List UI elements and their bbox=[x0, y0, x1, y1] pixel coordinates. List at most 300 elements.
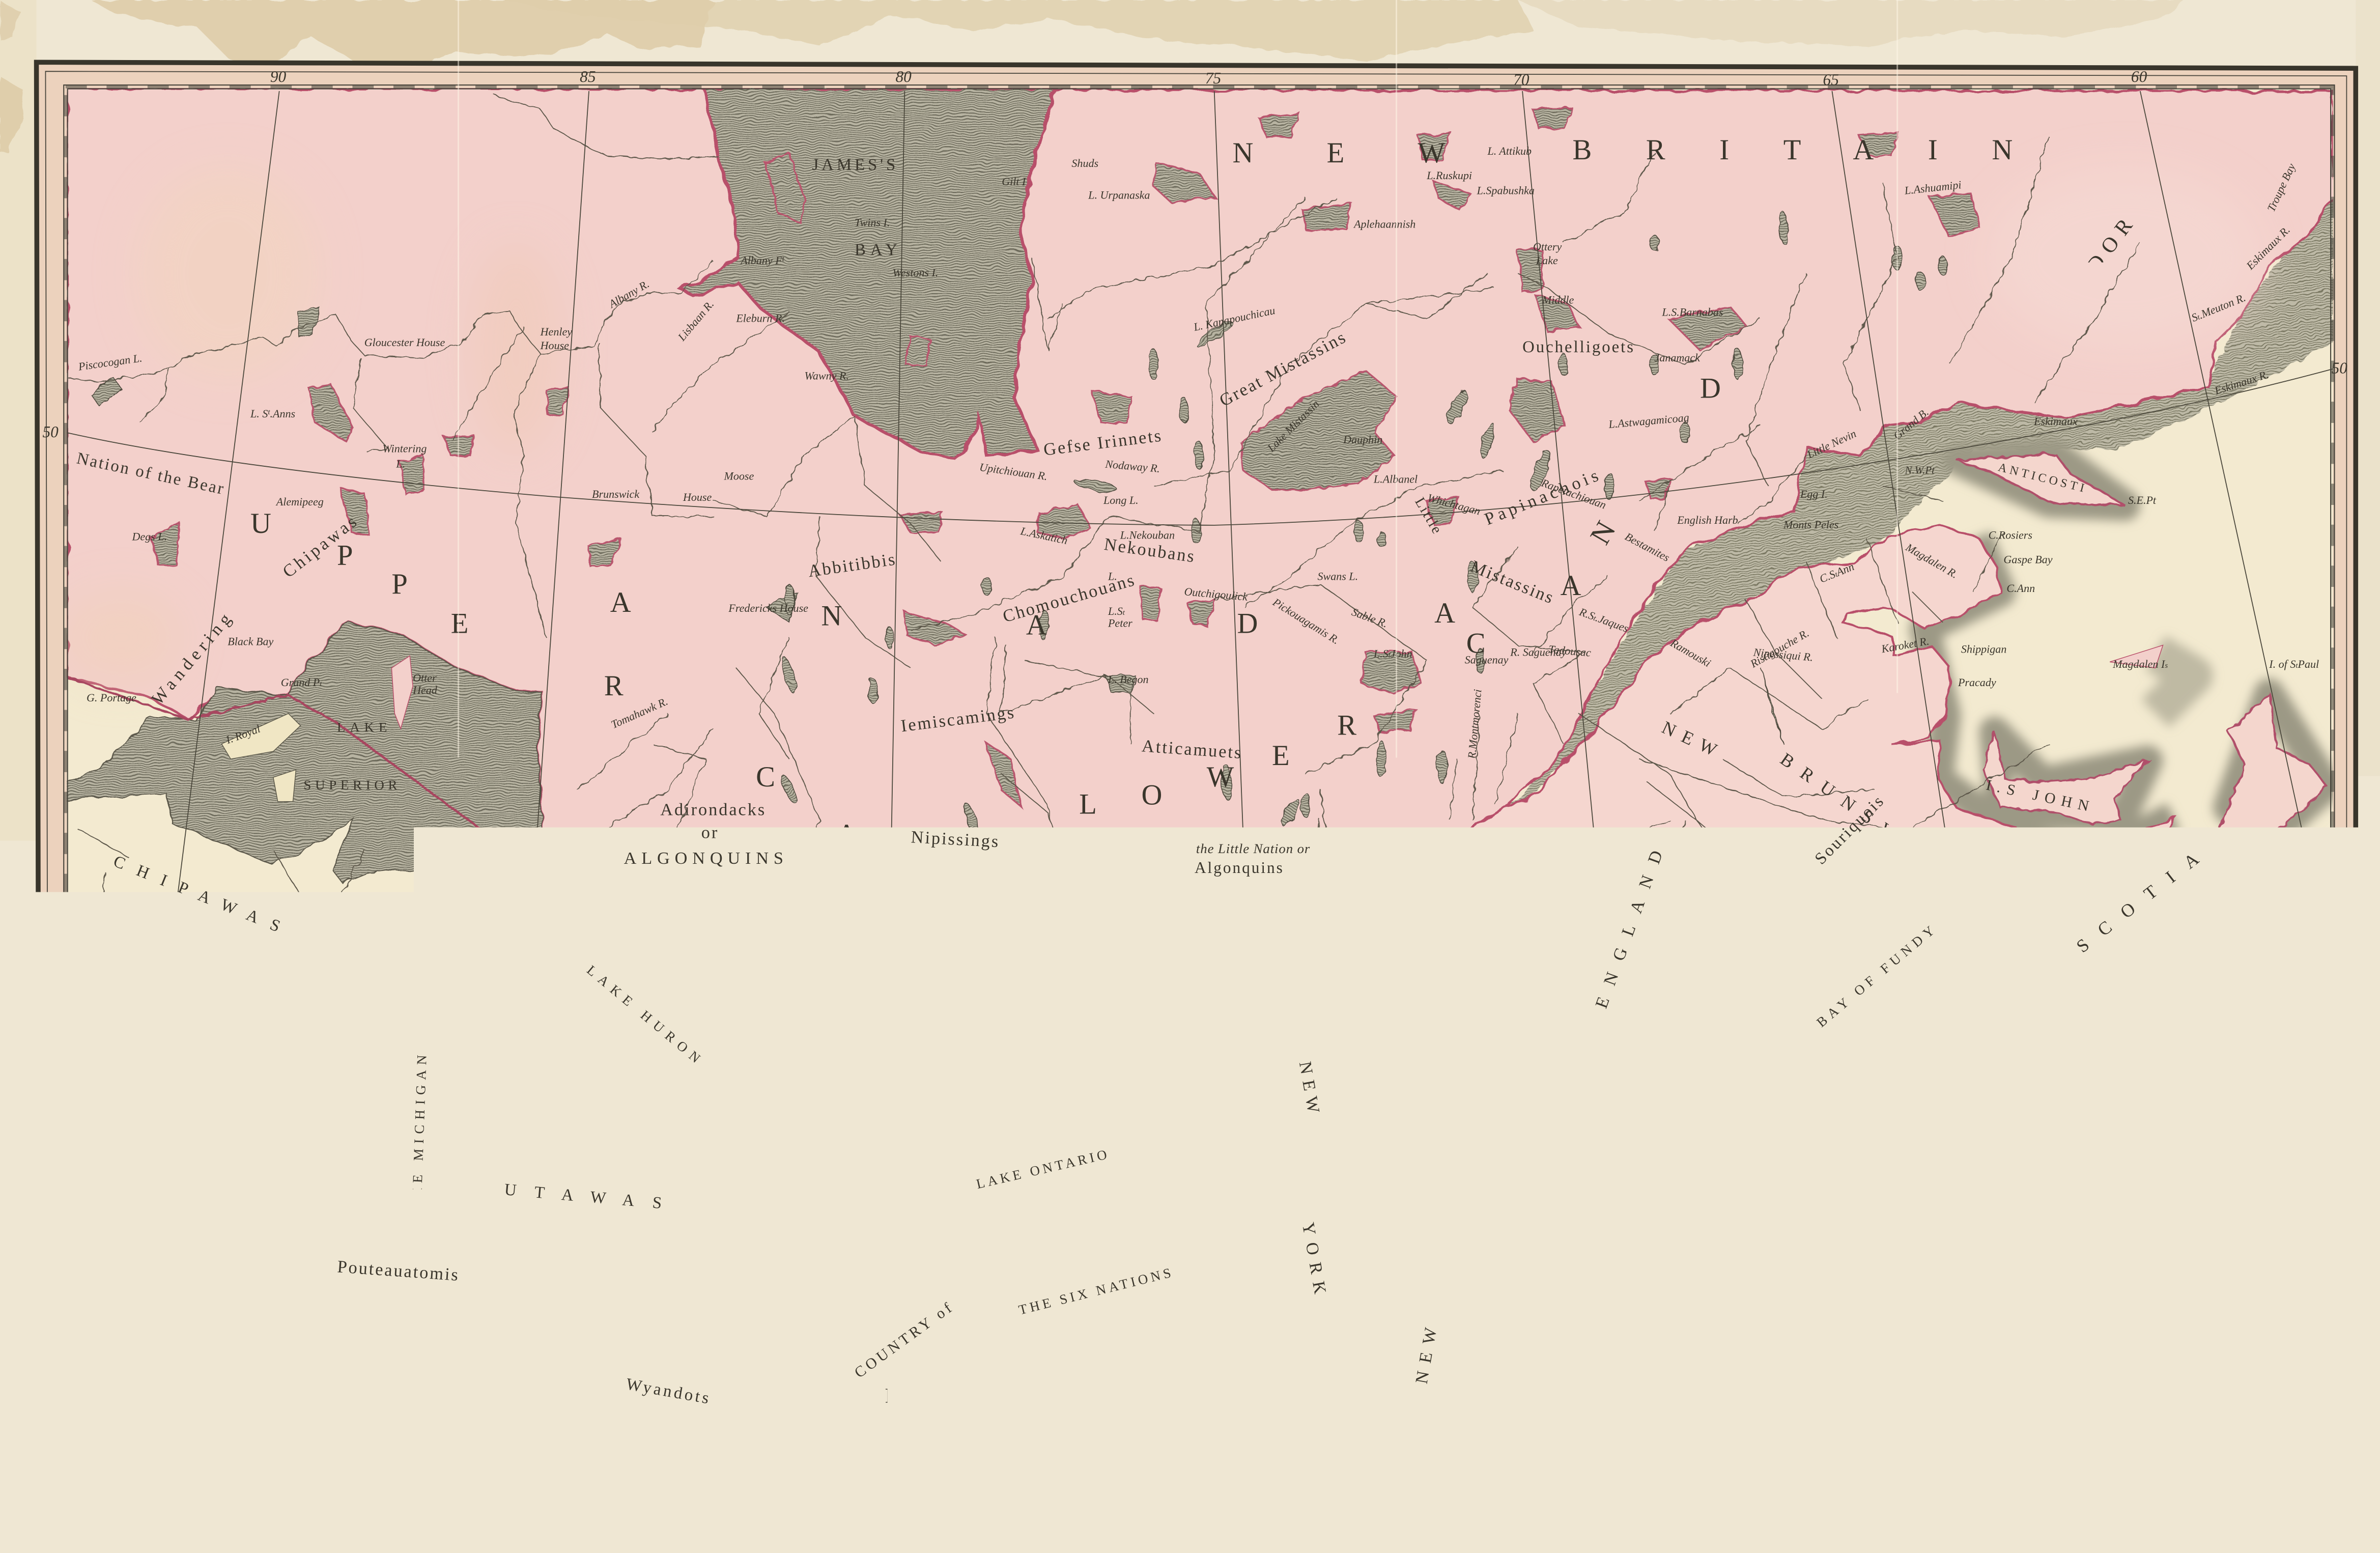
labels: small place names: Peterham bbox=[1469, 1235, 1513, 1248]
labels: small place names: Rufus R. bbox=[103, 993, 143, 1016]
labels: small place names: R.StNicholas bbox=[482, 1098, 540, 1111]
labels: small place names: La Heve bbox=[2051, 1023, 2091, 1047]
labels: small place names: L. Begon bbox=[1108, 673, 1149, 686]
labels: lower-left territories: Chipawas bbox=[542, 1016, 622, 1071]
label: River St Lawrence: RIVER S bbox=[1641, 572, 1730, 647]
labels: small place names: Sandwich bbox=[1586, 1318, 1630, 1331]
labels: small place names: Monts Peles bbox=[1783, 518, 1838, 531]
labels: small place names: St.Thomas bbox=[1555, 792, 1603, 820]
labels: small place names: Iroquois Bay bbox=[788, 1045, 848, 1069]
labels: New Brunswick and Nova Scotia: ANTICOSTI bbox=[1997, 461, 2089, 496]
labels: small place names: White Fish Pt bbox=[447, 853, 509, 881]
sea: River St Lawrence estuary bbox=[1371, 190, 2333, 949]
labels: small place names: Wawny R. bbox=[805, 370, 849, 382]
labels: small place names: StJoseph bbox=[624, 895, 663, 925]
boundary line across the lakes bbox=[67, 677, 929, 1321]
labels: small place names: Degs L. bbox=[131, 530, 167, 543]
labels: New Brunswick and Nova Scotia: NEW bbox=[1659, 717, 1727, 764]
labels: small place names: Albany Ft bbox=[1297, 1250, 1342, 1262]
parallels bbox=[67, 369, 2342, 1456]
big territory letters: BRITAIN bbox=[1573, 134, 2013, 166]
labels: small place names: George bbox=[1662, 1074, 1695, 1086]
labels: small place names: C.Cod bbox=[1659, 1285, 1688, 1297]
labels: small place names: Bay bbox=[2125, 807, 2142, 820]
labels: small place names: t bbox=[268, 408, 270, 416]
labels: lower-left territories: Molhominis bbox=[266, 984, 349, 1072]
labels: tribal names, upper map: Algonquins bbox=[1195, 859, 1284, 877]
big territory letters: W bbox=[1207, 761, 1234, 793]
labels: small place names: Temiscaming bbox=[911, 758, 962, 769]
big territory letters: A bbox=[1561, 570, 1581, 602]
labels: small place names: L.Askatich bbox=[1019, 524, 1069, 547]
labels: small place names: t bbox=[782, 255, 785, 263]
labels: small place names: St.Ann bbox=[1791, 779, 1820, 792]
labels: small place names: Eskimaux R. bbox=[2213, 368, 2270, 397]
labels: small place names: R.Masquenonge bbox=[1288, 846, 1324, 919]
labels: small place names: Long L. bbox=[1103, 494, 1139, 506]
label: James's Bay bbox=[812, 156, 902, 259]
labels: New Brunswick and Nova Scotia: BRUNSWICK bbox=[1776, 749, 1967, 891]
labels: small place names: Cape bbox=[1973, 785, 1997, 798]
Lake Ontario bbox=[929, 1104, 1207, 1222]
labels: small place names: R. Bachouanan bbox=[598, 828, 664, 876]
labels: small place names: Port Rossignol bbox=[2002, 1045, 2071, 1075]
big territory letters: D bbox=[1058, 992, 1079, 1024]
labels: small place names: Sandusky bbox=[649, 1367, 693, 1381]
labels: small place names: Eskimaux bbox=[2033, 415, 2078, 428]
labels: small place names: Vermillion R. bbox=[88, 972, 148, 1004]
labels: small place names: Whichtagan bbox=[1426, 491, 1482, 518]
labels: small place names: Ashiks bbox=[492, 1031, 523, 1044]
labels: small place names: Portsmouth bbox=[1517, 1195, 1570, 1208]
cartouche: subtitle: from its embouchure to its source bbox=[1888, 1321, 2216, 1345]
labels: small place names: Pt.au Pele bbox=[686, 1292, 732, 1305]
big territory letters: N bbox=[821, 601, 842, 632]
labels: New Brunswick and Nova Scotia bbox=[1659, 461, 2216, 1032]
labels: New Brunswick and Nova Scotia: Souriquois bbox=[1811, 791, 1888, 868]
labels: small place names: Saguenay bbox=[1465, 653, 1509, 666]
labels: small place names: South R. bbox=[982, 891, 1019, 925]
labels: small place names: Long Fall bbox=[1041, 825, 1086, 837]
big territory letters bbox=[250, 134, 2013, 1087]
labels: small place names: Piscocogan L. bbox=[77, 351, 143, 373]
labels: small place names bbox=[77, 145, 2319, 1445]
labels: small place names: Oepack bbox=[1806, 825, 1841, 837]
labels: small place names: Bartoul bbox=[1597, 1155, 1631, 1168]
labels: lower-left territories: UTAWAS bbox=[503, 1180, 681, 1214]
labels: small place names: Lake Mistassin bbox=[1264, 398, 1322, 455]
labels: New York and New England: NEW bbox=[1295, 1060, 1324, 1120]
degree numbers: 60 bbox=[2131, 68, 2147, 86]
labels: small place names: Magdalen Is bbox=[2112, 658, 2168, 670]
degree numbers: 45 bbox=[2335, 891, 2350, 909]
big territory letters: R bbox=[604, 670, 624, 702]
label: River St Lawrence: T bbox=[1718, 567, 1734, 584]
labels: small place names: Nicolete bbox=[1418, 886, 1458, 911]
labels: small place names: Boston Bay bbox=[1639, 1262, 1691, 1275]
labels: small place names: Bank bbox=[1703, 1312, 1726, 1325]
soft stains on the pink wash bbox=[61, 167, 2261, 683]
labels: small place names: Head bbox=[412, 684, 438, 696]
region: New Britain, Upper and Lower Canada (pink) bbox=[67, 88, 2333, 1269]
island: Cape Breton bbox=[2218, 694, 2327, 841]
big territory letters: O bbox=[1142, 780, 1162, 811]
labels: small place names: Annapolis Royal bbox=[1911, 965, 1986, 1005]
labels: small place names: C.Rosiers bbox=[1989, 529, 2032, 542]
labels: tribal names, upper map: Atticamuets bbox=[1141, 736, 1243, 763]
labels: small place names: Rhode I. bbox=[1558, 1379, 1577, 1419]
labels: small place names: St.John bbox=[1351, 980, 1383, 993]
labels: tribal names, upper map bbox=[75, 327, 1635, 877]
labels: small place names: Gloucester House bbox=[364, 336, 445, 349]
labels: small place names: Gilt I bbox=[1002, 175, 1027, 188]
label: Gulf of St Lawrence: T bbox=[2050, 611, 2067, 629]
labels: small place names: Pascol bbox=[1605, 1125, 1636, 1138]
big territory letters: A bbox=[1434, 598, 1455, 629]
labels: small place names: Bay bbox=[1214, 1132, 1232, 1144]
labels: small place names: Norwich bbox=[1426, 1092, 1465, 1105]
cartouche flourishes bbox=[1940, 1181, 2163, 1291]
labels: tribal names, upper map: Mistassins bbox=[1468, 557, 1557, 608]
labels: small place names: Wisconsin R. bbox=[111, 1144, 171, 1171]
labels: small place names: R.Montmorenci bbox=[1465, 689, 1484, 760]
labels: small place names: R.Miami bbox=[524, 1328, 565, 1353]
labels: small place names: Outchigoulick bbox=[1184, 585, 1249, 603]
labels: small place names: Grand B. bbox=[1891, 406, 1931, 442]
labels: small place names: Westons I. bbox=[893, 266, 938, 279]
labels: small place names: St.Croix bbox=[1731, 943, 1766, 956]
region: New Brunswick and Nova Scotia (pink) bbox=[1371, 525, 2255, 1108]
labels: small place names: Sandlands Hr bbox=[2163, 911, 2224, 924]
island: Long Island bbox=[1348, 1375, 1503, 1460]
cartouche oval bbox=[1878, 1219, 2227, 1431]
labels: small place names: N.Cape bbox=[2276, 696, 2311, 709]
degree numbers: 65 bbox=[1823, 71, 1839, 89]
engraver credit: Neele sc. Strand. bbox=[2282, 1492, 2344, 1502]
labels: small place names: Middle bbox=[1542, 293, 1574, 306]
labels: small place names: L.Spabushka bbox=[1477, 184, 1535, 197]
labels: small place names: Pickouagamis R. bbox=[1270, 596, 1342, 646]
labels: small place names: Grand R. bbox=[486, 1144, 527, 1156]
degree numbers: 90 bbox=[97, 1464, 114, 1482]
big territory letters: U bbox=[250, 508, 271, 540]
labels: small place names: Lawrence bbox=[2197, 703, 2242, 716]
labels: small place names: Windsor bbox=[1419, 1119, 1457, 1132]
labels: small place names: of Niagara bbox=[1017, 1189, 1066, 1202]
Lake Huron bbox=[531, 908, 879, 1233]
big territory letters: N bbox=[1584, 516, 1622, 550]
labels: small place names: I. of StPaul bbox=[2269, 658, 2319, 670]
labels: small place names: L. S bbox=[250, 407, 268, 420]
labels: small place names: R.Chaudiere bbox=[1501, 826, 1557, 865]
labels: small place names: I. Royal bbox=[224, 722, 262, 746]
labels: small place names: St.Francis bbox=[1392, 920, 1439, 951]
labels: small place names: R.Clyde or St.Johns bbox=[1647, 773, 1719, 844]
labels: New Brunswick and Nova Scotia: BAY OF FUNDY bbox=[1814, 920, 1941, 1030]
labels: small place names: C.Sambro bbox=[2079, 1004, 2126, 1028]
cartouche: of the: — of the — bbox=[2011, 1278, 2093, 1296]
labels: small place names: Lunenburg bbox=[2003, 1004, 2052, 1016]
cartouche word: Map: Map bbox=[2014, 1234, 2089, 1278]
labels: small place names: Fall of Niagara bbox=[928, 1206, 991, 1217]
labels: small place names: Otter bbox=[413, 671, 437, 684]
labels: lower-left territories: CHIPAWAS bbox=[111, 852, 295, 941]
labels: small place names: Gentilly bbox=[1427, 863, 1463, 876]
labels: small place names: Green Bay bbox=[325, 1054, 360, 1102]
labels: New Brunswick and Nova Scotia: SCOTIA bbox=[2073, 838, 2216, 956]
big territory letters: D bbox=[1237, 608, 1258, 640]
labels: small place names: Karoket R. bbox=[1880, 634, 1930, 656]
big territory letters: N bbox=[912, 877, 933, 909]
labels: small place names: Bestamites bbox=[1623, 530, 1672, 564]
labels: New York and New England: NEW bbox=[1412, 1318, 1442, 1385]
labels: small place names: Amherst I bbox=[2106, 697, 2151, 710]
labels: small place names: Henley bbox=[540, 325, 572, 338]
labels: small place names: Pracady bbox=[1958, 676, 1996, 689]
labels: small place names: Leodharabury bbox=[1009, 1323, 1073, 1336]
James's Bay bbox=[680, 88, 1055, 460]
labels: small place names: Penobscot bbox=[1730, 1037, 1777, 1050]
labels: lower-left territories: Pouteauatomis bbox=[336, 1257, 460, 1285]
labels: small place names: Ft.Erie bbox=[953, 1238, 984, 1251]
labels: small place names: Sandwich bbox=[665, 1247, 709, 1259]
label: Gulf of St Lawrence: OF bbox=[2129, 557, 2155, 576]
labels: small place names: Dauphin bbox=[1343, 433, 1382, 446]
labels: small place names: S.E.Pt bbox=[2128, 494, 2157, 506]
cartouche: map title: to illustrate a picturesque bbox=[1913, 1345, 2186, 1370]
labels: small place names: Kingston bbox=[1130, 1093, 1171, 1106]
labels: New York and New England: ENGLAND bbox=[1592, 835, 1671, 1011]
labels: small place names: StGeorges bbox=[1697, 1298, 1742, 1311]
labels: small place names: Tomahawk R. bbox=[609, 695, 670, 731]
labels: small place names: Troupe Bay bbox=[2264, 161, 2298, 214]
labels: lakes: LAKE ONTARIO bbox=[975, 1146, 1111, 1192]
labels: small place names: Aplehaannish bbox=[1353, 217, 1415, 230]
labels: small place names: Montreal bbox=[1302, 949, 1344, 962]
labels: small place names: Rapetachiouan bbox=[1539, 476, 1608, 512]
labels: tribal names, upper map: Chomouchouans bbox=[1001, 570, 1138, 626]
region: New Jersey (pink) bbox=[1233, 1374, 1348, 1460]
labels: tribal names, upper map: Chipawas bbox=[279, 511, 362, 582]
degree numbers: 75 bbox=[1258, 1464, 1274, 1482]
labels: small place names: Marameg R. bbox=[455, 1189, 513, 1213]
label: Gulf of St Lawrence: S bbox=[2033, 614, 2055, 641]
labels: small place names: Detroit bbox=[622, 1248, 655, 1261]
labels: small place names: Manchester bbox=[1358, 1197, 1412, 1209]
big territory letters: E bbox=[1272, 740, 1290, 772]
cartouche: Canadas: CANADAS . bbox=[1999, 1399, 2114, 1417]
labels: tribal names, upper map: Nekoubans bbox=[1103, 534, 1197, 567]
labels: small place names: Bennington bbox=[1363, 1213, 1415, 1226]
labels: small place names: Shuds bbox=[1071, 157, 1098, 170]
labels: tribal names, upper map: Little bbox=[1411, 495, 1446, 538]
labels: small place names: Magdalen R. bbox=[1903, 541, 1960, 581]
region: New England (green) bbox=[1358, 833, 1809, 1420]
imprint line: 1807 by R. Phillips New Bridge Street. bbox=[1163, 1510, 1425, 1528]
labels: small place names: Ouranghena bbox=[1562, 750, 1618, 789]
labels: tribal names, upper map: Great Mistassins bbox=[1216, 327, 1350, 410]
labels: small place names: Katskill bbox=[1278, 1295, 1313, 1308]
labels: small place names: Esuaghicks R. bbox=[828, 891, 875, 951]
cartouche: River St Lawrence: RIVER S bbox=[1894, 1292, 2015, 1322]
labels: tribal names, upper map: Nipissings bbox=[911, 827, 1000, 851]
labels: small place names: Bay bbox=[1731, 1050, 1748, 1062]
labels: small place names: Upitchiouan R. bbox=[979, 461, 1049, 483]
big territory letters: C bbox=[756, 761, 775, 793]
labels: small place names: Johnstown bbox=[1131, 1034, 1179, 1047]
labels: small place names: Hadley bbox=[1472, 1254, 1505, 1267]
cartouche: River St Lawrence: T bbox=[2018, 1295, 2027, 1312]
labels: small place names: L. bbox=[1108, 570, 1117, 582]
degree numbers: 45 bbox=[44, 936, 60, 954]
labels: small place names: Charlestown bbox=[1462, 1126, 1520, 1144]
labels: small place names: Egg I. bbox=[1800, 488, 1828, 500]
big territory letters: A bbox=[836, 819, 857, 851]
island: St John bbox=[1984, 732, 2148, 824]
labels: small place names: Black Bay bbox=[228, 635, 274, 648]
label: Labrador: LABRADOR bbox=[2016, 208, 2142, 364]
labels: small place names: Shippigan bbox=[1961, 642, 2006, 655]
labels: lakes: LAKE ERIE bbox=[748, 1272, 840, 1303]
big territory letters: P bbox=[337, 540, 353, 571]
labels: small place names: Amherstburg bbox=[664, 1262, 723, 1275]
labels: lakes: SUPERIOR bbox=[303, 777, 401, 793]
degree numbers: 75 bbox=[1205, 69, 1221, 87]
labels: small place names: Wabash R. bbox=[367, 1391, 414, 1426]
cartouche: map title bbox=[1878, 1181, 2227, 1436]
labels: small place names: Ramouski bbox=[1668, 636, 1713, 669]
big territory letters: L bbox=[1079, 789, 1097, 821]
labels: small place names: Three Rivers bbox=[1364, 824, 1395, 882]
labels: tribal names, upper map: the Little Nation or bbox=[1196, 841, 1310, 856]
big territory letters: A bbox=[972, 938, 993, 969]
label: Gulf of St Lawrence: GULF bbox=[2094, 502, 2175, 541]
labels: small place names: Moose bbox=[723, 469, 754, 482]
labels: small place names: G. Portage bbox=[87, 691, 136, 704]
labels: lower-left territories: Wyandots bbox=[625, 1375, 713, 1408]
labels: small place names: Belfast bbox=[1669, 1040, 1701, 1053]
labels: small place names: R.St.Jaques bbox=[1577, 605, 1630, 635]
imprint line: London Published March 1 bbox=[974, 1510, 1155, 1528]
labels: lower-left territories: Masooutens bbox=[79, 1207, 191, 1272]
labels: small place names: Sable R. bbox=[1350, 605, 1390, 630]
labels: tribal names, upper map: or bbox=[701, 823, 719, 842]
labels: small place names: .Anns bbox=[270, 407, 295, 420]
labels: small place names: Boston bbox=[1541, 1277, 1572, 1290]
labels: small place names: Old Caichi R. bbox=[1874, 689, 1935, 727]
labels: small place names: Berthier bbox=[1345, 916, 1382, 928]
labels: small place names: N.W.Pt bbox=[1905, 464, 1935, 476]
labels: small place names: Peter bbox=[1108, 617, 1132, 630]
labels: small place names: R. Saguenay bbox=[1510, 645, 1567, 658]
labels: tribal names, upper map: Wandering bbox=[148, 606, 238, 709]
coastal shading: gulf and Atlantic bbox=[1404, 454, 2327, 1434]
labels: small place names: Long I. bbox=[888, 1257, 920, 1270]
labels: small place names: Janamack bbox=[1655, 351, 1701, 364]
labels: small place names: Eel R. bbox=[273, 1416, 302, 1445]
yellow wash: lands south of the lakes bbox=[67, 941, 881, 1460]
labels: small place names: Nipisings R. bbox=[863, 768, 905, 821]
cartouche: River St Lawrence: .LAWRENCE bbox=[2030, 1292, 2208, 1322]
labels: small place names: Kinderhook bbox=[1343, 1265, 1397, 1278]
labels: New York and New England bbox=[1295, 835, 1671, 1385]
labels: small place names: C.Canso bbox=[2261, 858, 2301, 871]
labels: tribal names, upper map: Nation of the Bear bbox=[75, 449, 226, 498]
labels: small place names: Jedemweight R. bbox=[1856, 860, 1926, 898]
labels: small place names: Wintering bbox=[383, 442, 427, 455]
labels: small place names: L.Sinagoe bbox=[1293, 928, 1339, 941]
labels: small place names: Jemseig bbox=[1806, 809, 1843, 822]
labels: small place names: L.Ashuamipi bbox=[1904, 178, 1962, 197]
labels: small place names: L.Nipissing bbox=[846, 867, 898, 880]
labels: small place names: Nipessiqui R. bbox=[1752, 645, 1814, 664]
labels: small place names: White R. bbox=[483, 1121, 521, 1134]
labels: small place names: L.Nekouban bbox=[1120, 529, 1175, 542]
labels: small place names: Ouramana L. bbox=[1494, 941, 1555, 959]
labels: small place names: C.Ann bbox=[2006, 582, 2035, 595]
labels: small place names: Quebec bbox=[1432, 769, 1451, 805]
labels: New York and New England: YORK bbox=[1298, 1221, 1331, 1303]
paper fold lines bbox=[459, 0, 1897, 1553]
labels: small place names: Beaumont bbox=[1494, 796, 1541, 826]
labels: lakes: LONG I. bbox=[1378, 1423, 1438, 1456]
labels: small place names: Merrit bbox=[1798, 1007, 1828, 1020]
labels: small place names: L.Simon bbox=[827, 1095, 864, 1108]
labels: small place names: Fort Dauphin bbox=[2268, 702, 2314, 761]
labels: small place names: R.StJoseph bbox=[462, 1243, 512, 1272]
labels: lakes: LAKE MICHIGAN bbox=[408, 1050, 430, 1227]
labels: small place names: East Cape bbox=[2147, 746, 2194, 758]
labels: small place names: Cornwall bbox=[1373, 1019, 1416, 1035]
labels: lakes: LAKE HURON bbox=[584, 962, 708, 1070]
degree numbers: 65 bbox=[2032, 1464, 2048, 1482]
labels: small place names: C.StAnn bbox=[1818, 560, 1856, 585]
labels: small place names: Ottery bbox=[1533, 240, 1562, 253]
labels: small place names: Nodaway R. bbox=[1104, 458, 1160, 475]
labels: small place names: Falls bbox=[1533, 863, 1556, 876]
labels: small place names: Grand Pt bbox=[281, 676, 322, 689]
labels: small place names: R.Genesee bbox=[936, 1246, 984, 1281]
labels: small place names: Ristigouche R. bbox=[1748, 627, 1811, 670]
labels: lower-left territories bbox=[79, 852, 1175, 1408]
labels: small place names: Cardigan bbox=[2125, 792, 2168, 804]
degree numbers: 85 bbox=[580, 68, 596, 86]
labels: tribal names, upper map: Abbitibbis bbox=[807, 549, 897, 581]
big territory letters: D bbox=[1700, 373, 1721, 404]
labels: small place names: Grand bbox=[490, 1050, 520, 1062]
labels: small place names: Oguntecogs bbox=[1490, 949, 1544, 962]
labels: small place names: L.StClair bbox=[614, 1229, 656, 1241]
big territory letters: NEW bbox=[1233, 137, 1446, 169]
region: New York and Six Nations (pale yellow) bbox=[868, 1017, 1404, 1427]
labels: small place names: Machiche R. bbox=[1348, 838, 1380, 897]
labels: small place names: Salisbury bbox=[1615, 1204, 1658, 1217]
labels: small place names: L.S.Barnabas bbox=[1661, 305, 1723, 318]
labels: small place names: L. Kanapouchicau bbox=[1192, 304, 1276, 333]
labels: small place names: Eskimaux R. bbox=[2244, 223, 2292, 272]
labels: small place names: L.Albanel bbox=[1373, 472, 1418, 485]
labels: small place names: L.Ruskupi bbox=[1426, 169, 1472, 182]
label: Gulf of St Lawrence bbox=[2033, 502, 2238, 641]
labels: small place names: L. Kawinagamick bbox=[1111, 773, 1191, 786]
labels: small place names: Tatamagouche bbox=[2019, 855, 2084, 868]
labels: small place names: Turtle R. bbox=[719, 871, 748, 912]
labels: small place names: L.St bbox=[1108, 605, 1125, 617]
labels: small place names: Fredericks House bbox=[728, 602, 808, 614]
labels: tribal names, upper map: Gefse Irinnets bbox=[1042, 426, 1164, 460]
labels: small place names: Owls Head bbox=[2124, 965, 2177, 987]
labels: tribal names, upper map: Ouchelligoets bbox=[1522, 338, 1635, 356]
